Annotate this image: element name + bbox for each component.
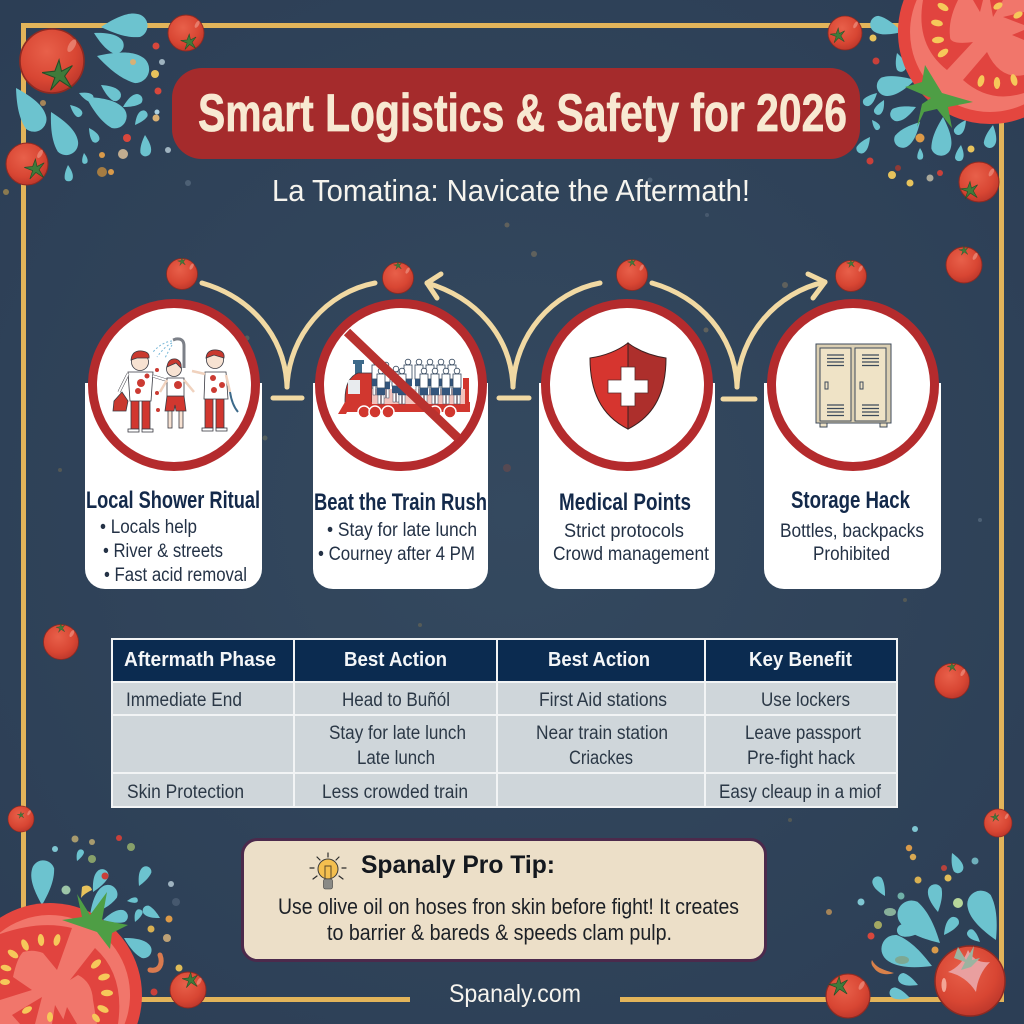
tomato: bottom right large — [935, 946, 1005, 1016]
table header: Best Action — [344, 649, 447, 671]
splash: bottom right — [826, 826, 1004, 1005]
splash: bottom left — [27, 835, 182, 996]
tomato markers on flow — [166, 258, 866, 294]
table rows: Leave passport — [745, 723, 862, 744]
body text: Bottles, backpacks — [780, 521, 924, 542]
panel: beat the train rush — [313, 304, 488, 589]
body text — [780, 521, 924, 565]
panel: storage hack — [764, 304, 941, 589]
background speckles — [58, 178, 982, 822]
splash: top right — [854, 14, 1001, 186]
tomato: frame right — [984, 809, 1012, 837]
body text: Crowd management — [553, 544, 710, 565]
callout: pro tip — [242, 840, 766, 960]
footer: Spanaly.com — [449, 980, 581, 1008]
tomato: right side — [946, 246, 982, 283]
heading: Medical Points — [559, 489, 691, 516]
bullet list — [318, 520, 477, 565]
panel: local shower ritual — [85, 304, 262, 589]
bullet list: • Courney after 4 PM — [318, 544, 475, 565]
table header: Key Benefit — [749, 649, 852, 671]
table rows: Near train station — [536, 723, 668, 744]
tip body — [278, 894, 739, 945]
prohibition slash — [347, 332, 458, 438]
table rows: Immediate End — [126, 690, 242, 711]
bullet list: • River & streets — [103, 541, 223, 562]
tip body: Use olive oil on hoses fron skin before fight! It creates — [278, 894, 739, 919]
heading: Beat the Train Rush — [314, 489, 487, 516]
table header — [113, 640, 896, 681]
table rows — [113, 683, 896, 806]
table rows: Less crowded train — [322, 782, 468, 803]
body text: Prohibited — [813, 544, 890, 565]
table rows: Use lockers — [761, 690, 850, 711]
tomato: right upper — [959, 162, 999, 202]
tip heading: Spanaly Pro Tip: — [361, 851, 555, 879]
bullet list: • Stay for late lunch — [327, 520, 477, 541]
icon: light bulb — [310, 853, 346, 889]
subtitle: La Tomatina: Navicate the Aftermath! — [272, 173, 750, 208]
heading: Storage Hack — [791, 487, 910, 514]
tomato slice: top right — [898, 0, 1024, 128]
panel: medical points — [539, 304, 715, 589]
table header: Aftermath Phase — [124, 649, 276, 671]
table rows: Skin Protection — [127, 782, 244, 803]
body text — [553, 521, 710, 565]
table rows: First Aid stations — [539, 690, 667, 711]
tomato: bottom right small — [826, 974, 870, 1018]
bullet list: • Locals help — [100, 517, 197, 538]
table rows: Criackes — [569, 748, 633, 769]
tomato: left corner — [6, 143, 48, 185]
table rows: Stay for late lunch — [329, 723, 466, 744]
title banner — [172, 68, 860, 159]
tomato slice: bottom left — [0, 892, 142, 1024]
icon: crowded train — [338, 359, 470, 418]
tomato: right mid — [934, 662, 970, 698]
icon: lockers — [816, 344, 891, 427]
icon: people helping with shower — [113, 339, 238, 432]
splash: top left — [3, 11, 171, 195]
icon: medical shield — [590, 343, 666, 429]
tip body: to barrier & bareds & speeds clam pulp. — [327, 920, 672, 945]
bullet list — [100, 517, 247, 586]
table rows: Head to Buñól — [342, 690, 450, 711]
tomato: top left small — [168, 15, 204, 51]
tomato: frame left — [8, 806, 34, 832]
title banner: Smart Logistics & Safety for 2026 — [198, 84, 847, 143]
body text: Strict protocols — [564, 521, 684, 542]
table rows: Pre-fight hack — [747, 748, 855, 769]
tomato: bottom left small — [170, 972, 206, 1008]
tomato: left side — [44, 623, 78, 660]
bullet list: • Fast acid removal — [104, 565, 247, 586]
table rows: Late lunch — [357, 748, 435, 769]
table header: Best Action — [548, 649, 650, 671]
table — [111, 638, 898, 808]
flow arrows — [202, 274, 825, 399]
table rows: Easy cleaup in a miof — [719, 782, 882, 803]
tomato: top right small — [828, 16, 862, 50]
tomato: top left large — [20, 29, 84, 93]
heading: Local Shower Ritual — [86, 487, 260, 514]
